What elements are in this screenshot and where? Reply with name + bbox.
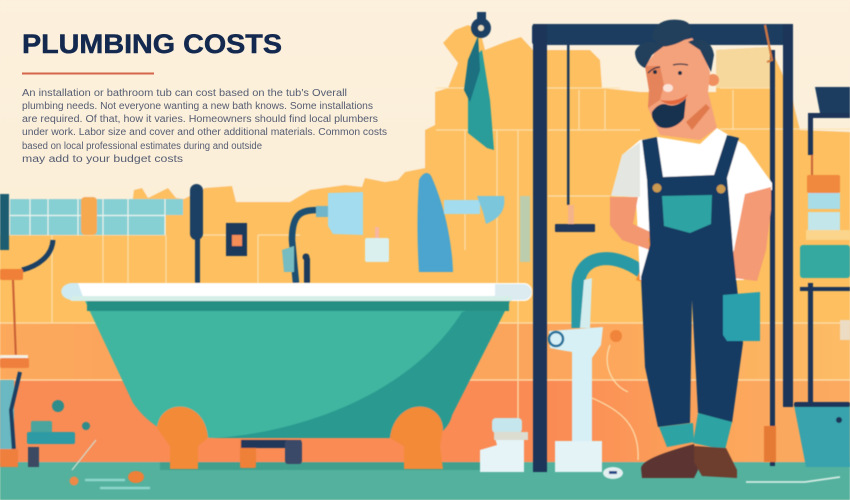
floor [0, 462, 850, 500]
left hose [22, 240, 53, 270]
deep orange wall band [0, 380, 850, 464]
neck shadow [686, 104, 710, 130]
wall tile grout [0, 88, 850, 470]
bib buttons [652, 184, 726, 194]
wall outlet [226, 223, 247, 256]
mouth [660, 94, 688, 104]
body text: based on local professional estimates during and outside [22, 141, 262, 152]
pedestal faucet [549, 259, 652, 472]
right shelving [800, 87, 850, 403]
hook and teal towel [464, 12, 494, 150]
cuffs [659, 423, 694, 447]
lighter wall patch [716, 47, 770, 88]
body text [22, 88, 387, 165]
orange valve and wire [592, 330, 638, 460]
yellow tiled wall [0, 25, 850, 330]
loose pipe fitting [480, 418, 623, 479]
overall bib and straps [641, 135, 743, 427]
ear [707, 74, 719, 86]
floor streaks [746, 477, 840, 482]
beard [652, 98, 686, 128]
shoes [641, 444, 698, 478]
hair [635, 20, 714, 72]
title underline [22, 72, 154, 74]
orange wall band [0, 323, 850, 381]
under-tub drain [240, 440, 302, 468]
shower frame [520, 24, 793, 472]
towel bar and cup [444, 196, 504, 224]
left arm [610, 197, 672, 250]
teal bucket [794, 402, 850, 467]
face and neck [645, 38, 717, 140]
t-shirt [611, 128, 772, 280]
plumber [610, 20, 772, 478]
body text: may add to your budget costs [22, 154, 183, 165]
left shelf unit [0, 269, 29, 467]
tub foot left [157, 407, 208, 469]
tool pouch [723, 292, 760, 341]
tub foot right [390, 407, 443, 469]
body text: plumbing needs. Not everyone wanting a new bath knows. Some installations [22, 101, 373, 112]
wall tap [282, 206, 332, 283]
body text: under work. Labor size and cover and other additional materials. Common costs [22, 127, 387, 138]
right arm [725, 187, 771, 281]
bathtub [61, 283, 532, 438]
title: PLUMBING COSTS [22, 29, 282, 59]
body text: An installation or bathroom tub can cost based on the tub's Overall [22, 88, 347, 99]
bib pocket [662, 195, 712, 233]
soap dispenser [365, 227, 389, 262]
blue hanging towel [418, 173, 453, 272]
floor tool items [27, 400, 150, 488]
orange post on floor [764, 426, 776, 462]
blue wall box [328, 192, 363, 235]
face shadow [645, 66, 664, 108]
eyes and nose [648, 64, 688, 92]
left monitor panel [0, 194, 9, 250]
brush on wall [190, 184, 203, 284]
teal tile row [10, 197, 183, 235]
body text: are required. Of that, how it varies. Homeowners should find local plumbers [22, 114, 378, 125]
